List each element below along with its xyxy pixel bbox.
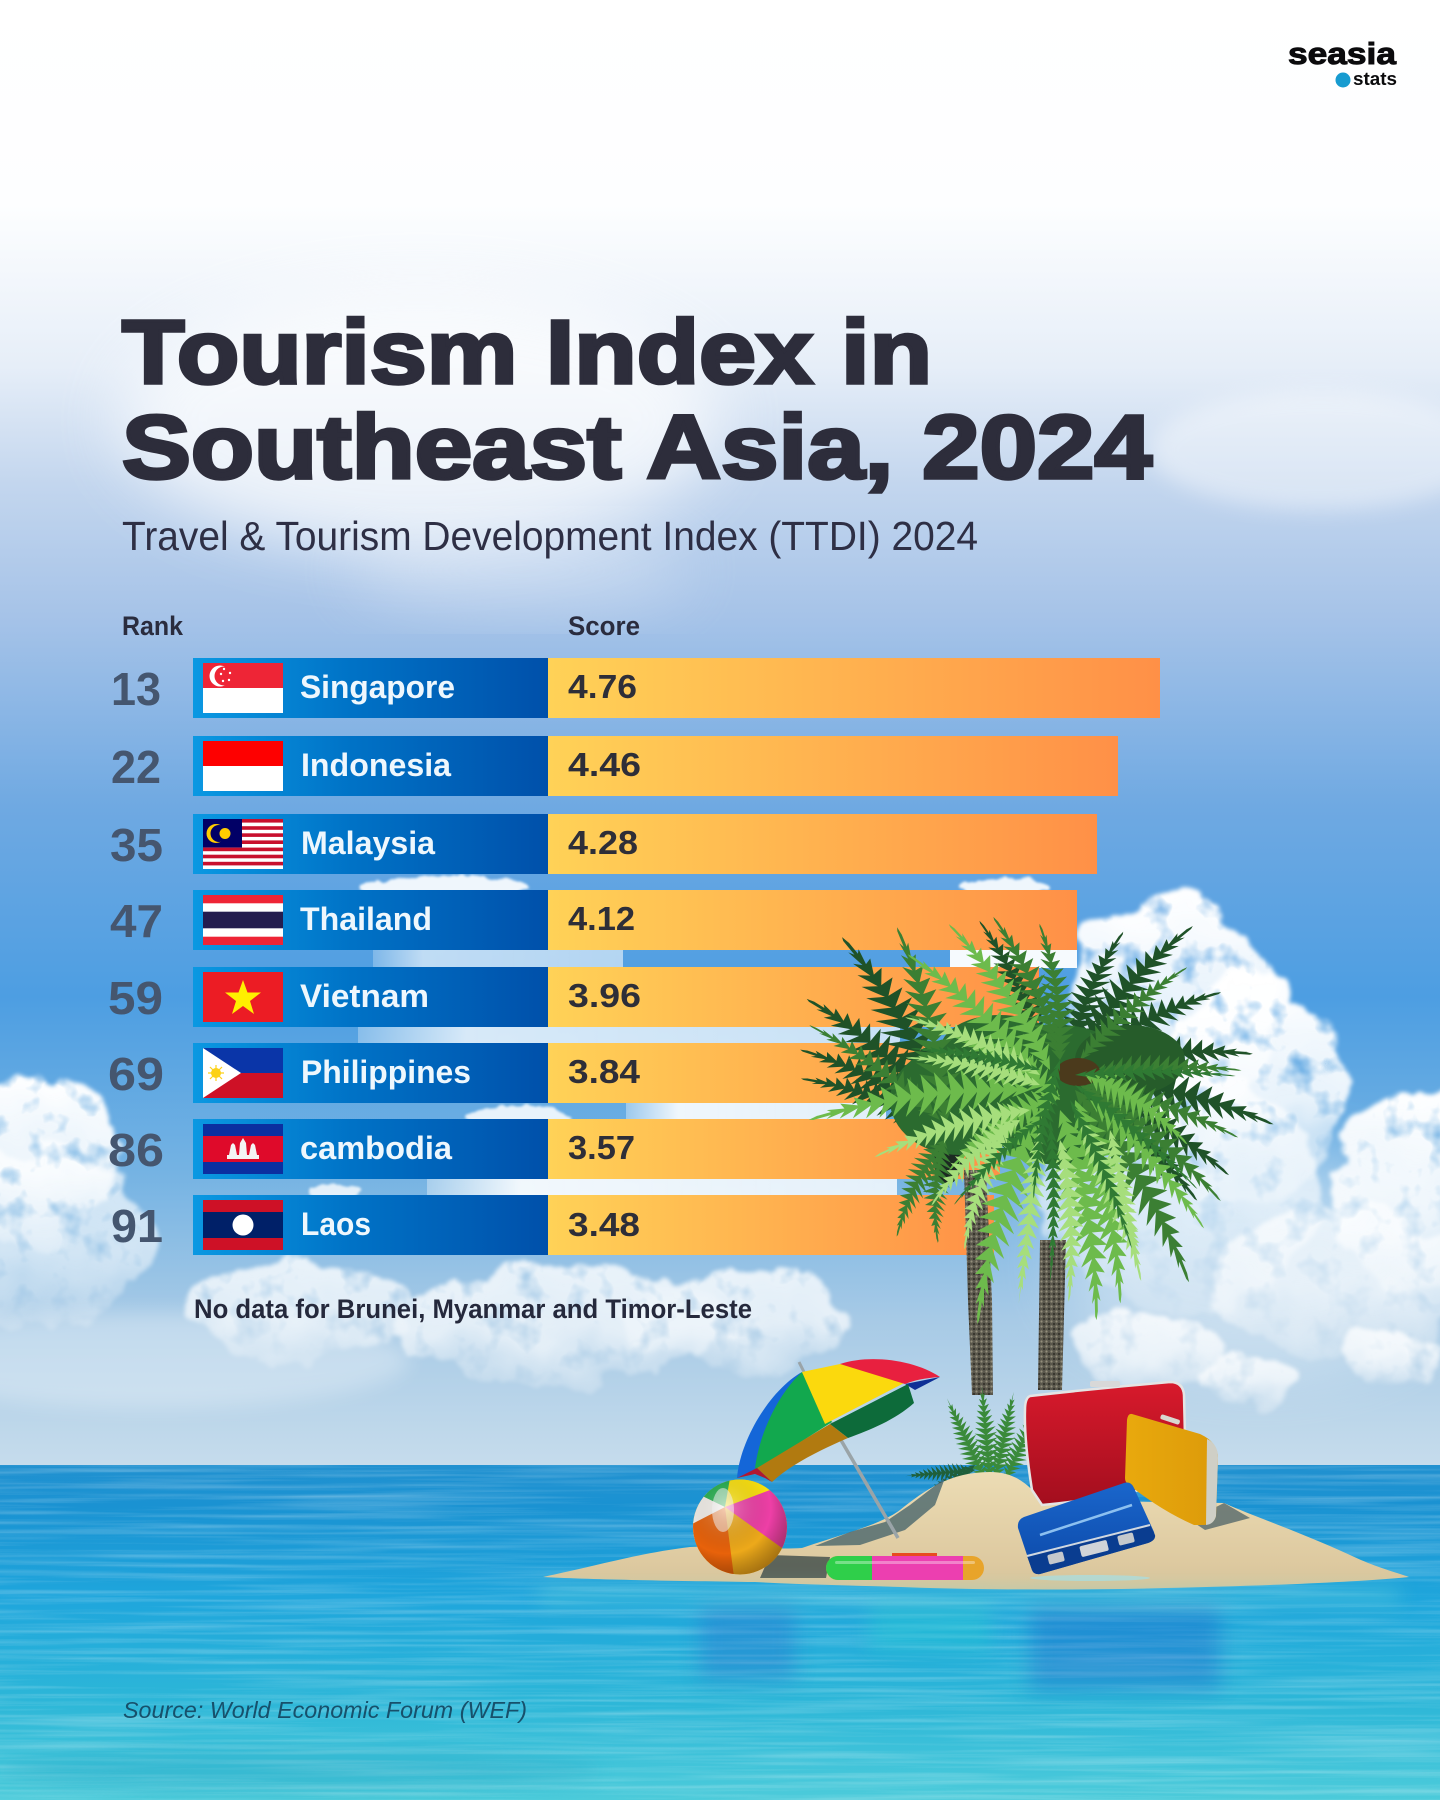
flag: Vietnam bbox=[203, 972, 283, 1022]
sea bbox=[0, 1465, 1440, 1800]
sand island bbox=[543, 1472, 1409, 1590]
row: Thailand: 47 bbox=[110, 895, 163, 947]
subtitle: Travel & Tourism Development Index (TTDI) 2024 bbox=[122, 513, 978, 559]
row: Singapore: 4.76 bbox=[568, 668, 637, 705]
logo: seasia stats: seasia bbox=[1288, 36, 1397, 71]
row: Indonesia: 4.46 bbox=[568, 746, 641, 783]
row: Laos bbox=[111, 1195, 994, 1255]
row: Thailand bbox=[110, 890, 1077, 950]
logo: seasia stats: stats bbox=[1353, 69, 1397, 89]
row: Laos: 3.48 bbox=[568, 1206, 640, 1243]
beach ball bbox=[693, 1480, 787, 1574]
swim ring bbox=[826, 1553, 984, 1580]
flag: Indonesia bbox=[203, 741, 283, 791]
row: Malaysia: 4.28 bbox=[568, 824, 638, 861]
row: Laos: 91 bbox=[111, 1200, 163, 1252]
clouds bbox=[0, 895, 1440, 1408]
row: Thailand: Thailand bbox=[300, 901, 432, 937]
title bbox=[122, 303, 1152, 498]
row: Indonesia: Indonesia bbox=[301, 747, 451, 783]
row: Philippines: 69 bbox=[108, 1048, 164, 1100]
flag: Singapore bbox=[203, 663, 283, 713]
flag: Thailand bbox=[203, 895, 283, 945]
row: Cambodia: 86 bbox=[108, 1124, 164, 1176]
palm trunks bbox=[964, 1170, 1066, 1395]
row: Philippines: Philippines bbox=[301, 1054, 471, 1090]
row: Thailand: 4.12 bbox=[568, 900, 635, 937]
row: Laos: Laos bbox=[301, 1206, 371, 1242]
column header: rank: Rank bbox=[122, 611, 184, 641]
cloud strips seen between the bars bbox=[311, 876, 1077, 1200]
flag: Laos bbox=[203, 1200, 283, 1250]
row: Vietnam: 3.96 bbox=[568, 977, 641, 1014]
row: Malaysia bbox=[110, 814, 1097, 874]
row: Philippines: 3.84 bbox=[568, 1053, 641, 1090]
blue suitcase bbox=[1018, 1483, 1155, 1574]
row: Cambodia: cambodia bbox=[300, 1130, 452, 1166]
title: Tourism Index in bbox=[122, 303, 932, 403]
row: Singapore bbox=[111, 658, 1160, 718]
small palm bush bbox=[904, 1384, 1051, 1518]
row: Malaysia: Malaysia bbox=[301, 825, 435, 861]
row: Vietnam: 59 bbox=[108, 972, 163, 1024]
crown core foliage bbox=[890, 1015, 1185, 1165]
logo: seasia stats bbox=[1288, 36, 1397, 89]
yellow suitcase bbox=[1125, 1414, 1218, 1525]
note: missing data: No data for Brunei, Myanmar and Timor-Leste bbox=[194, 1294, 752, 1324]
row: Singapore: 13 bbox=[111, 663, 161, 715]
row: Malaysia: 35 bbox=[110, 819, 163, 871]
row: Cambodia: 3.57 bbox=[568, 1129, 635, 1166]
island reflection bbox=[540, 1588, 1400, 1690]
row: Singapore: Singapore bbox=[300, 669, 455, 705]
title: Southeast Asia, 2024 bbox=[122, 398, 1152, 498]
row: Vietnam: Vietnam bbox=[300, 978, 429, 1014]
flag: Philippines bbox=[203, 1048, 283, 1098]
column header: score: Score bbox=[568, 611, 640, 641]
palm crowns bbox=[800, 900, 1276, 1324]
flag: Cambodia bbox=[203, 1124, 283, 1174]
flag: Malaysia bbox=[203, 819, 283, 869]
umbrella bbox=[737, 1359, 940, 1538]
row: Vietnam bbox=[108, 967, 1039, 1027]
red suitcase bbox=[1025, 1381, 1186, 1505]
row: Philippines bbox=[108, 1043, 1020, 1103]
row: Indonesia: 22 bbox=[111, 741, 161, 793]
row: Indonesia bbox=[111, 736, 1118, 796]
source: Source: World Economic Forum (WEF) bbox=[123, 1697, 527, 1723]
row: Cambodia bbox=[108, 1119, 1000, 1179]
